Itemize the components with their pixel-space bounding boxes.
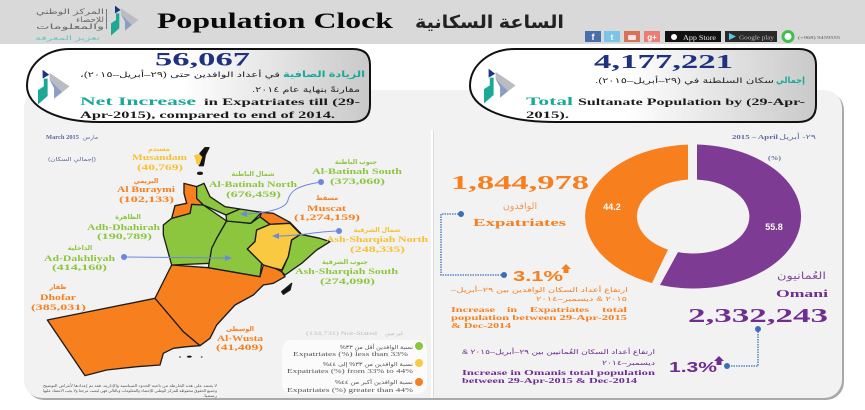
icon: logo small (38, 70, 70, 104)
label: Musandam: مسندم (148, 146, 170, 153)
map of Oman (47, 148, 330, 376)
label: Ash-Sharqiah North (326, 227, 429, 254)
stat: expatriates increase: ٢٠١٥ & ديسمبر–٢٠١٤ (536, 296, 628, 303)
stat: expatriates increase: in (507, 305, 518, 314)
label: not stated: غير مبين (385, 331, 403, 337)
label: Dhofar (31, 284, 86, 312)
stat: omani: العُمانيون (777, 271, 826, 282)
stat: expatriates (451, 172, 589, 229)
stat: expatriates increase: ارتفاع أعداد السكان الوافدين بين ٢٩–أبريل– (451, 285, 628, 294)
callout: net increase: Apr-2015), compared to end of 2014. (80, 110, 335, 120)
callout: total population: Total (526, 94, 574, 108)
social icons: f (592, 32, 596, 42)
map disclaimer: وجميع الحقوق محفوظة للمركز الوطني للإحصاء والمعلومات وبالتالي فهي ليست مرجعا ولا يجب الاعتماد عليها (43, 388, 217, 394)
stat: expatriates increase: Expatriates (530, 305, 589, 314)
map date heading (46, 134, 98, 163)
social icons: Google play (739, 36, 774, 42)
arrow: Ad-Dakhiliyah (121, 254, 232, 261)
social icons: (+968) 9459555 (798, 35, 841, 40)
label: not stated: (134,731) Not-Stated (306, 330, 377, 337)
legend item: greater than 44: Expatriates (%) greater than 44% (287, 387, 414, 394)
legend item: from 33 to 44 (287, 359, 423, 375)
region: Ash-Sharqiah North (247, 223, 301, 270)
callout: total population: Sultanate Population by (29-Apr- (578, 97, 805, 107)
callout: net increase: الزيادة الصافية (283, 69, 365, 80)
label: Dhofar: ظفار (49, 284, 66, 291)
callout: net increase (27, 49, 370, 122)
callout: net increase: Net Increase (80, 94, 197, 108)
logo: national centre for statistics: تعزيز المعرفة (35, 35, 101, 42)
label: Muscat: مسقط (316, 195, 338, 202)
label: Muscat (294, 195, 360, 222)
title english: Population Clock (157, 8, 394, 33)
callout: total population: 2015). (526, 110, 569, 120)
island: Masirah (282, 283, 292, 294)
chart date heading (732, 132, 817, 162)
map disclaimer: لا يعتمد على هذه الخارطة من ناحية الحدود السياسية والإدارية، فقد تم إعدادها لأغراض التوضيح (43, 383, 217, 389)
legend (282, 340, 427, 394)
map date heading: مارس (83, 135, 98, 141)
logo: national centre for statistics (35, 6, 138, 42)
stat: omani: 2,332,243 (688, 305, 828, 327)
title arabic: الساعة السكانية (415, 12, 564, 32)
region: Musandam (194, 148, 209, 166)
region: Muscat (260, 212, 301, 233)
stat: expatriates: الوافدون (503, 201, 537, 212)
label: Ash-Sharqiah North: شمال الشرقية (354, 227, 400, 234)
label: Al Buraymi: (102,133) (119, 194, 174, 204)
legend item: less than 33: Expatriates (%) less than 33% (293, 351, 409, 358)
connector: omani (724, 326, 761, 369)
label: Adh-Dhahirah (87, 214, 161, 241)
region: Al-Wusta (155, 265, 285, 346)
label: Adh-Dhahirah: Adh-Dhahirah (87, 223, 161, 232)
donut chart: 55.8 (765, 222, 783, 232)
label: Al Buraymi (117, 178, 176, 204)
stat: expatriates increase: population between 29-Apr-2015 (451, 313, 627, 322)
label: Al-Batinah North: (676,459) (226, 189, 281, 199)
stat: expatriates increase: total (602, 305, 627, 314)
social icons (585, 30, 841, 43)
label: Al-Wusta: الوسطى (226, 326, 254, 333)
arrow: Ash-Sharqiah North (272, 228, 342, 239)
label: Al Buraymi: Al Buraymi (117, 185, 176, 194)
number: total population: 4,177,221 (594, 52, 733, 73)
label: Al-Batinah North (209, 171, 298, 199)
slice: Expatriates 44.2 (585, 145, 688, 283)
label: Al-Batinah South (312, 159, 403, 186)
stat: omani: Omani (776, 288, 828, 300)
donut chart (585, 144, 801, 288)
stat: omani increase: ارتفاع أعداد السكان العُمانيين بين ٢٩–أبريل–٢٠١٥ & (462, 347, 655, 356)
label: Muscat: (1,274,159) (294, 212, 360, 222)
label: Al-Batinah North: شمال الباطنة (231, 171, 275, 178)
logo: national centre for statistics: والمعلومات (36, 22, 105, 31)
logo: national centre for statistics: المركز الوطني (36, 7, 104, 16)
map disclaimer (43, 383, 217, 398)
label: Ash-Sharqiah South: جنوب الشرقية (322, 259, 368, 266)
legend item: less than 33 (293, 342, 423, 358)
label: Al-Wusta (216, 326, 263, 352)
stat: omani increase: 1.3% (669, 359, 717, 376)
stat: omani increase (462, 347, 724, 385)
logo: national centre for statistics: للإحصاء (76, 15, 104, 24)
arrow: Al-Batinah South (240, 179, 324, 217)
label: Al-Batinah South: Al-Batinah South (312, 167, 403, 176)
label: Musandam: Musandam (132, 153, 187, 162)
callout: total population (470, 49, 816, 122)
chart date heading: 2015 – April (732, 134, 778, 141)
stat: omani increase: Increase in Omanis total population (462, 368, 656, 377)
label: Al-Batinah South: (373,060) (330, 176, 385, 186)
label: Ash-Sharqiah North: (248,335) (350, 244, 405, 254)
region: Adh-Dhahirah (163, 204, 227, 265)
label: Musandam (132, 146, 187, 172)
label: Al-Batinah South: جنوب الباطنة (335, 159, 377, 166)
stat: expatriates: Expatriates (473, 218, 566, 229)
number: net increase: 56,067 (155, 50, 250, 70)
label: Adh-Dhahirah: (190,789) (97, 231, 152, 241)
region: Ash-Sharqiah South (282, 234, 330, 275)
legend item: greater than 44 (287, 378, 423, 394)
stat: expatriates increase: & Dec-2014 (451, 321, 511, 330)
connector: expatriates (441, 211, 507, 278)
label: Ash-Sharqiah South (295, 259, 399, 286)
stat: omani (688, 271, 828, 327)
region: Al-Batinah North (197, 183, 240, 215)
main panel (24, 90, 842, 398)
label: Al-Batinah North: Al-Batinah North (209, 180, 298, 189)
label: Ad-Dakhiliyah: (414,160) (52, 262, 107, 272)
stat: expatriates: 1,844,978 (451, 172, 589, 194)
stat: omani increase: between 29-Apr-2015 & Dec-2014 (462, 376, 637, 385)
donut chart: 44.2 (603, 202, 621, 212)
region: Ad-Dakhiliyah (208, 217, 270, 277)
label: Muscat: Muscat (307, 204, 347, 213)
chart date heading: (%) (768, 155, 781, 162)
callout: net increase: في أعداد الوافدين حتى (٢٩–أبريل–٢٠١٥)، (80, 69, 281, 79)
map date heading: March 2015 (46, 134, 80, 141)
label: Al-Wusta: Al-Wusta (217, 334, 263, 343)
callout: total population: سكان السلطنة في (٢٩–أبريل–٢٠١٥). (595, 75, 774, 85)
region: Dhofar (47, 298, 200, 376)
chart date heading: ٢٩- أبريل (779, 132, 817, 141)
header bar (0, 0, 865, 44)
label: Ad-Dakhiliyah: الداخلية (68, 245, 92, 252)
social icons: g+ (647, 33, 657, 42)
icon: logo small (484, 69, 516, 103)
map date heading: (إجمالي السكان) (48, 156, 96, 163)
map disclaimer: رسميا. (203, 393, 217, 398)
social icons: App Store (683, 34, 716, 42)
stat: expatriates increase: 3.1% (513, 268, 563, 285)
label: Ash-Sharqiah North: Ash-Sharqiah North (326, 235, 429, 244)
label: Musandam: (40,769) (137, 162, 183, 172)
region: Al-Batinah South (226, 209, 262, 223)
stat: expatriates increase (451, 264, 628, 330)
label: Al-Wusta: (41,409) (216, 342, 263, 352)
stat: expatriates increase: Increase (451, 305, 496, 314)
label: Adh-Dhahirah: الظاهرة (115, 214, 141, 221)
legend item: less than 33: نسبة الوافدين أقل من ٣٣% (340, 343, 414, 351)
legend item: greater than 44: نسبة الوافدين أكبر من ٤٤% (335, 378, 414, 386)
label: not stated (306, 330, 403, 337)
region: Al Buraymi (172, 183, 203, 218)
slice: Omani 55.8 (660, 144, 801, 288)
label: Al Buraymi: البريمي (134, 178, 158, 185)
label: Ash-Sharqiah South: Ash-Sharqiah South (295, 267, 399, 276)
legend item: from 33 to 44: نسبة الوافدين من ٣٣% إلى ٤٤% (323, 362, 414, 368)
callout: total population: إجمالي (776, 75, 805, 85)
social icons: t (611, 33, 614, 42)
label: Ad-Dakhiliyah (44, 245, 116, 272)
label: Dhofar: (385,031) (31, 302, 86, 312)
callout: net increase: مقارنةً بنهاية عام ٢٠١٤. (252, 85, 360, 94)
label: Ad-Dakhiliyah: Ad-Dakhliyah (44, 254, 116, 263)
main panel shadow (26, 92, 844, 400)
callout: net increase: in Expatriates till (29- (204, 97, 360, 107)
stat: omani increase: ديسمبر–٢٠١٤ (602, 360, 655, 367)
legend item: from 33 to 44: Expatriates (%) from 33% to 44% (287, 368, 414, 375)
label: Dhofar: Dhofar (40, 293, 77, 302)
label: Ash-Sharqiah South: (274,090) (320, 276, 375, 286)
